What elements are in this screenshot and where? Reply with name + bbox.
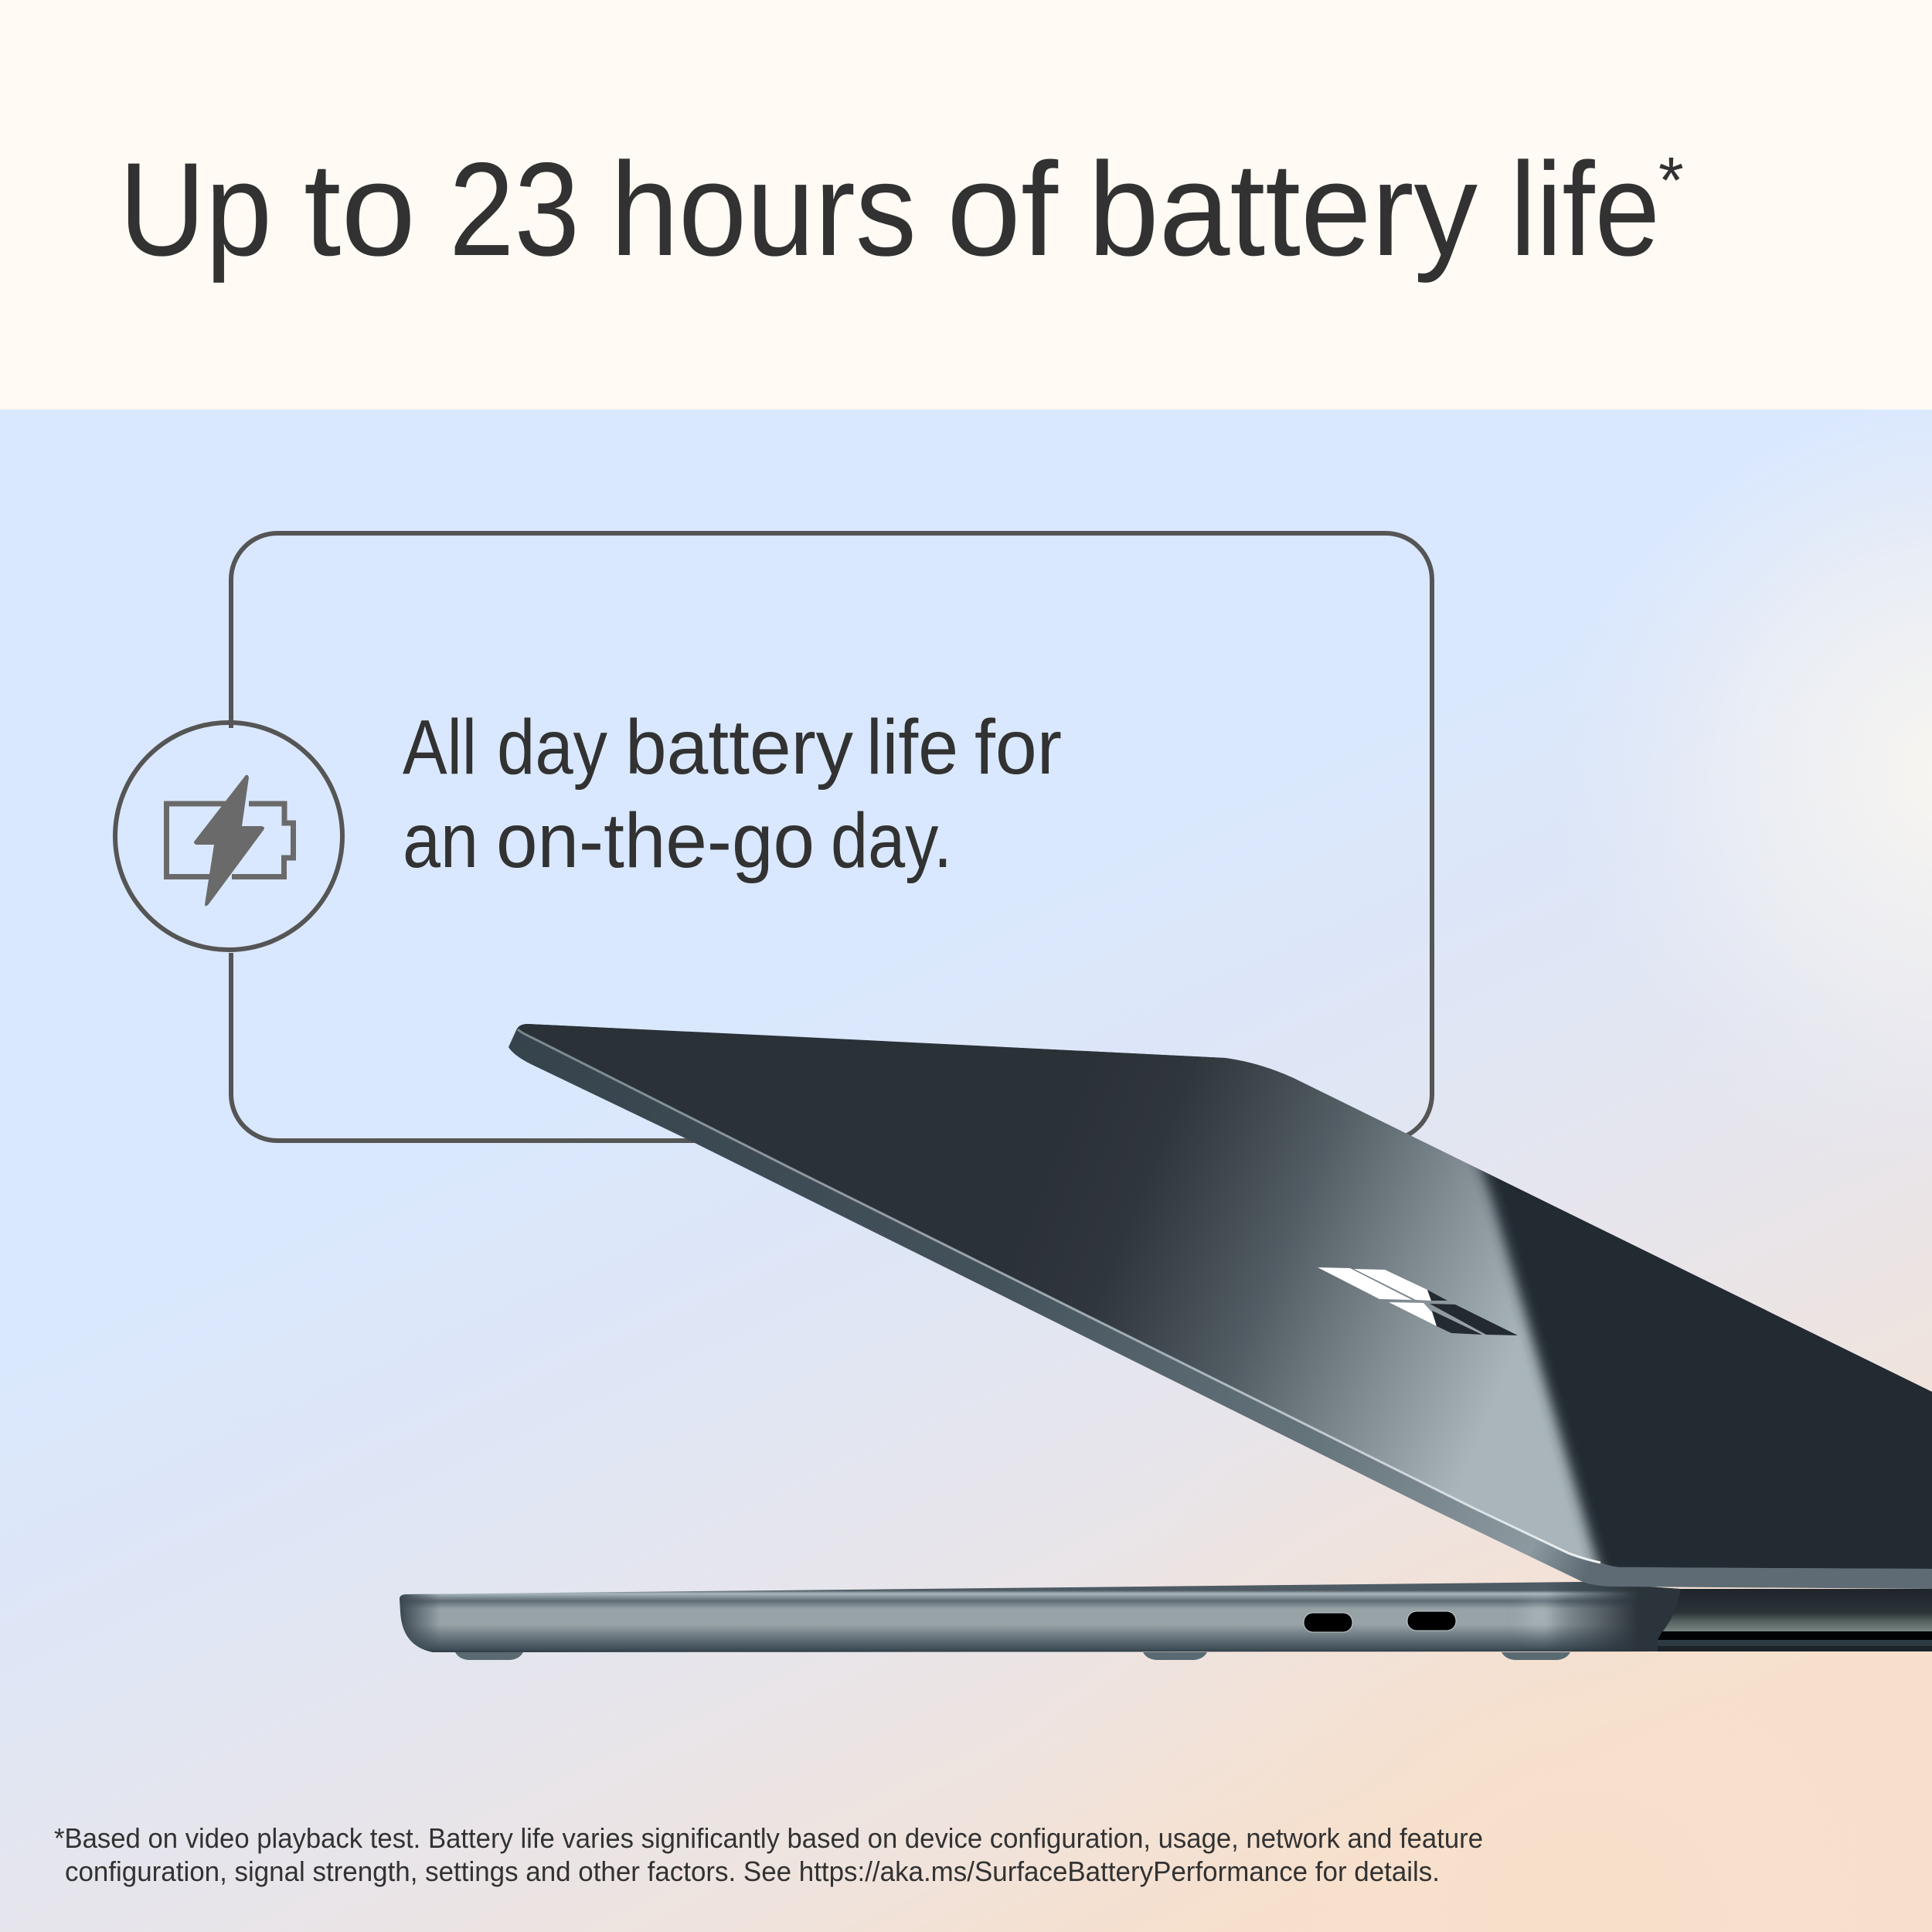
usb-c ports <box>1304 1613 1352 1632</box>
body text: an <box>403 798 478 884</box>
rubber feet <box>455 1652 523 1660</box>
footnote: *Based on video playback test. Battery life varies significantly based on device configuration, usage, network and feature <box>54 1822 1483 1854</box>
logo <box>1318 1267 1518 1335</box>
body text: for <box>975 704 1062 791</box>
gradient background <box>0 410 1932 1932</box>
body text: day. <box>831 798 952 884</box>
title: life <box>1510 135 1660 284</box>
body text: battery <box>625 704 853 791</box>
laptop <box>386 1005 1932 1662</box>
body text <box>403 704 1062 884</box>
body text: day <box>497 704 607 791</box>
body text: on-the-go <box>496 798 815 884</box>
body text: life <box>866 704 958 791</box>
lid edge highlight <box>518 1029 1600 1563</box>
footnote <box>54 1822 1483 1887</box>
footnote: configuration, signal strength, settings and other factors. See https://aka.ms/SurfaceBatteryPerformance for details. <box>65 1855 1440 1887</box>
lid top surface <box>502 1005 1932 1592</box>
hinge gap <box>1658 1589 1932 1651</box>
body text: All <box>403 704 477 791</box>
title <box>119 135 1684 284</box>
laptop base <box>400 1582 1680 1660</box>
panel: rounded outline with battery badge <box>115 533 1432 1141</box>
title: 23 <box>449 135 580 284</box>
title: battery <box>1088 135 1478 284</box>
title: hours <box>611 135 917 284</box>
title: * <box>1658 144 1684 216</box>
title: Up <box>119 135 272 284</box>
title: to <box>304 135 416 284</box>
laptop lid <box>502 1005 1932 1592</box>
lid edge band <box>509 1024 1932 1589</box>
panel outline <box>231 533 1432 1141</box>
header band <box>0 0 1932 410</box>
icon: battery charging badge <box>115 723 342 950</box>
title: of <box>947 135 1059 284</box>
